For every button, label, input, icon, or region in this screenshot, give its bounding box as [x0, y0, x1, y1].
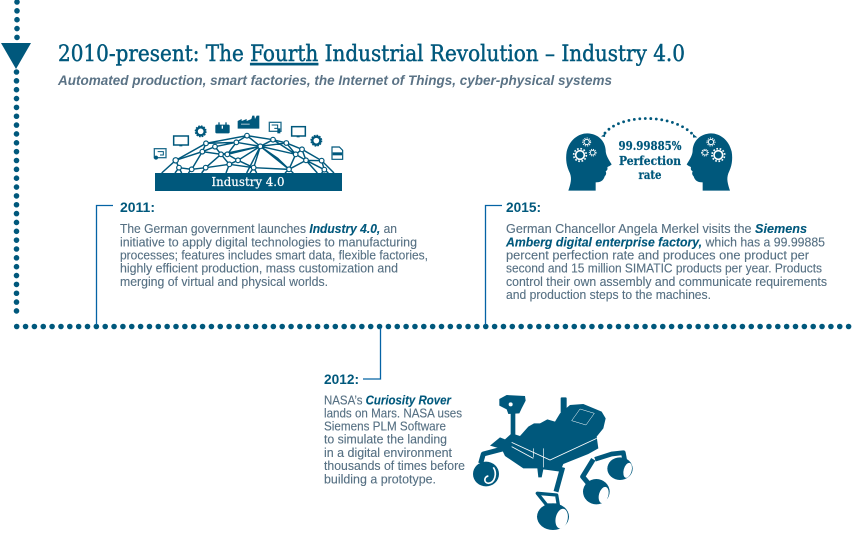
icon: Curiosity rover — [473, 395, 634, 530]
icon: gear left — [195, 126, 206, 137]
Industry 4.0 banner — [155, 173, 342, 191]
perfection rate label: 99.99885% — [618, 138, 682, 153]
subtitle: Automated production, smart factories, the Internet of Things, cyber-physical systems — [57, 72, 612, 88]
text block 2011: highly efficient production, mass customization and — [120, 262, 398, 276]
timeline: vertical dotted line and arrow — [1, 2, 31, 319]
connector 2015 — [486, 206, 502, 325]
icon: factory — [238, 116, 259, 129]
text block 2012: to simulate the landing — [324, 432, 447, 446]
connector 2012 — [363, 328, 380, 379]
text block 2015: second and 15 million SIMATIC products per year. Products — [506, 262, 822, 276]
perfection rate label: Perfection — [619, 153, 681, 168]
panel: 2011 — [120, 199, 428, 289]
icon: monitor left — [174, 136, 188, 146]
dotted arc — [601, 118, 697, 138]
connector 2011 — [96, 206, 113, 325]
perfection rate label — [618, 138, 682, 182]
text block 2015: Amberg digital enterprise factory, which has a 99.99885 — [505, 236, 825, 250]
rover wheels — [473, 457, 634, 530]
icon: monitor right — [292, 127, 305, 137]
icon: tablet left — [154, 149, 166, 160]
rover details — [512, 409, 597, 467]
left head — [566, 133, 612, 191]
rover legs — [481, 448, 625, 505]
icon: machine — [215, 122, 230, 133]
perfection rate label: rate — [638, 167, 662, 182]
text block 2012: lands on Mars. NASA uses — [324, 406, 462, 420]
text block 2012 — [324, 394, 465, 486]
right head — [687, 133, 732, 191]
text block 2011: The German government launches Industry 4.0, an — [120, 222, 397, 236]
rover body — [490, 404, 606, 477]
text block 2015 — [505, 222, 827, 302]
panel: 2015 — [505, 199, 827, 302]
text block 2011: processes; features includes smart data, flexible factories, — [120, 248, 428, 262]
icon: tablet right — [269, 122, 281, 133]
panel: 2012 — [324, 371, 465, 486]
text block 2012: NASA’s Curiosity Rover — [324, 394, 452, 408]
text block 2015: control their own assembly and communicate requirements — [506, 275, 827, 289]
title: 2010-present: The Fourth Industrial Revolution – Industry 4.0 — [58, 42, 685, 67]
text block 2012: in a digital environment — [324, 446, 453, 460]
heading 2011: 2011: — [120, 199, 155, 215]
icon: Industry 4.0 network dome — [154, 116, 343, 173]
heading 2012: 2012: — [324, 371, 359, 387]
icon: document — [332, 147, 343, 159]
heading 2015: 2015: — [506, 199, 541, 215]
text block 2012: building a prototype. — [324, 472, 436, 486]
text block 2011: initiative to apply digital technologies to manufacturing — [120, 236, 417, 250]
text block 2015: percent perfection rate and produces one product per — [506, 248, 809, 262]
text block 2011: merging of virtual and physical worlds. — [120, 275, 328, 289]
rover mast and camera — [499, 395, 567, 437]
icon: two heads with perfection rate — [566, 118, 732, 191]
text block 2011 — [120, 222, 428, 289]
text block 2012: thousands of times before — [324, 459, 465, 473]
text block 2015: German Chancellor Angela Merkel visits the Siemens — [506, 222, 807, 236]
timeline: horizontal dotted line — [17, 324, 852, 329]
icon: gear right — [311, 135, 322, 146]
text block 2012: Siemens PLM Software — [324, 420, 446, 434]
text block 2015: and production steps to the machines. — [506, 288, 711, 302]
Industry 4.0 banner: Industry 4.0 — [212, 175, 284, 189]
